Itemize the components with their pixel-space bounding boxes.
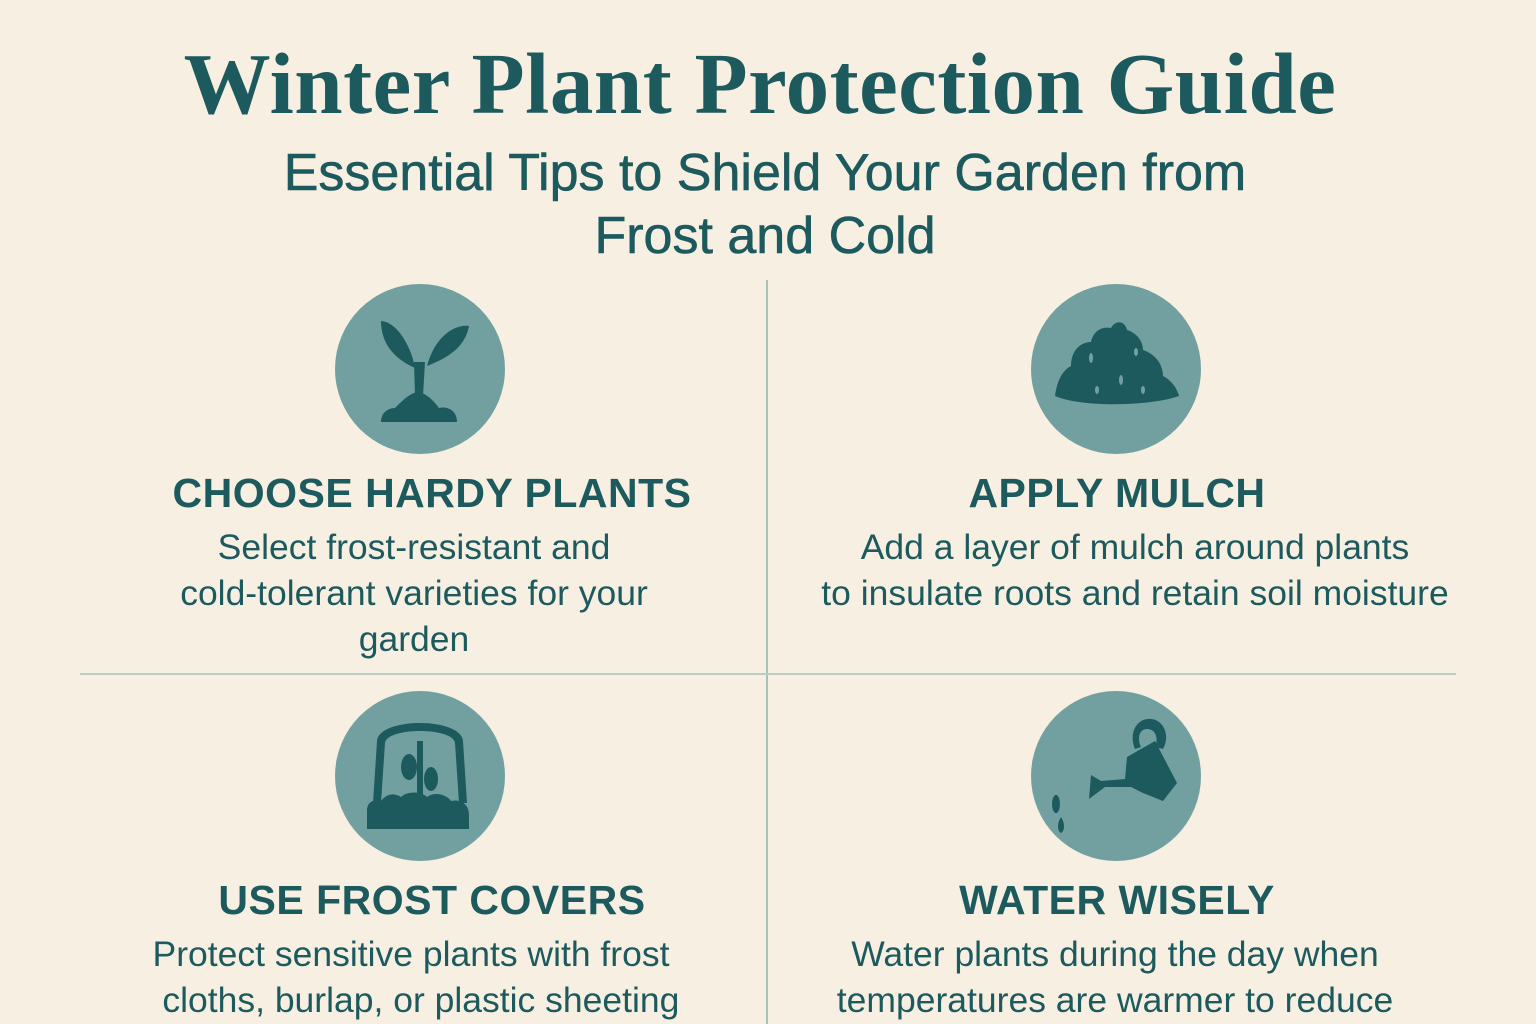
text: Protect sensitive plants with frost [153, 934, 669, 974]
subtitle: Frost and Cold [594, 207, 936, 265]
text: cloths, burlap, or plastic sheeting [162, 980, 679, 1020]
text: Water plants during the day when [851, 934, 1379, 974]
text: garden [359, 619, 469, 659]
panel: choose hardy plants [172, 284, 692, 659]
text [837, 934, 1393, 1020]
icon: seedling [335, 284, 505, 454]
text: Add a layer of mulch around plants [861, 527, 1409, 567]
heading: WATER WISELY [959, 877, 1275, 923]
text [821, 527, 1449, 613]
heading: CHOOSE HARDY PLANTS [172, 470, 692, 516]
icon: cloche [335, 691, 505, 861]
heading: APPLY MULCH [968, 470, 1266, 516]
text: cold-tolerant varieties for your [180, 573, 648, 613]
icon: mulch pile [1031, 284, 1201, 454]
text [153, 934, 679, 1020]
heading: USE FROST COVERS [218, 877, 646, 923]
title: Winter Plant Protection Guide [184, 35, 1336, 132]
text: to insulate roots and retain soil moisture [821, 573, 1449, 613]
subtitle [284, 144, 1246, 265]
text: temperatures are warmer to reduce [837, 980, 1393, 1020]
icon: watering can [1031, 691, 1201, 861]
subtitle: Essential Tips to Shield Your Garden from [284, 144, 1246, 202]
panel: use frost covers [153, 691, 679, 1020]
text: Select frost-resistant and [218, 527, 610, 567]
text [180, 527, 648, 659]
panel: water wisely [837, 691, 1393, 1020]
panel: apply mulch [821, 284, 1449, 613]
